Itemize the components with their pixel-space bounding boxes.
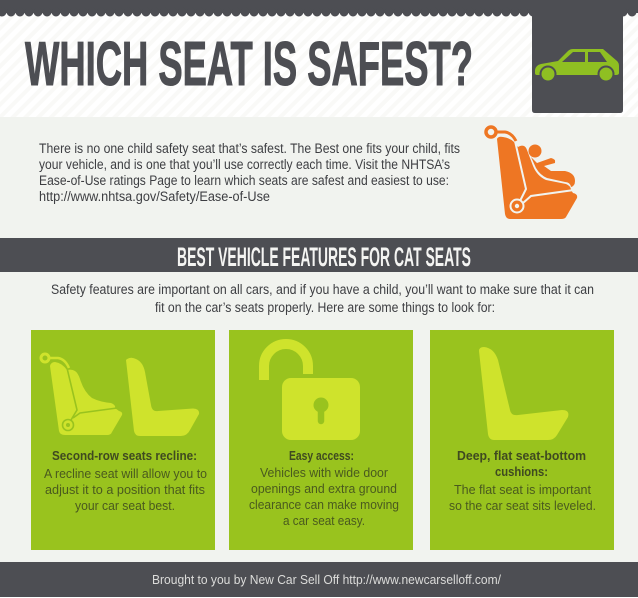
card text xyxy=(449,482,596,513)
card text: A recline seat will allow you to xyxy=(44,466,207,481)
icon: flat seat xyxy=(479,347,568,440)
card text: clearance can make moving xyxy=(249,497,399,512)
footer text: Brought to you by New Car Sell Off http://www.newcarselloff.com/ xyxy=(152,572,501,587)
intro panel xyxy=(0,117,638,238)
header panel xyxy=(0,0,638,117)
card heading xyxy=(457,448,586,479)
intro text: Ease-of-Use ratings Page to learn which seats are safest and easiest to use: xyxy=(39,173,449,188)
card heading: Easy access: xyxy=(289,448,354,463)
icon: orange child car seat xyxy=(486,127,577,219)
card: deep flat seat-bottom cushions xyxy=(430,330,614,550)
card: easy access xyxy=(229,330,413,550)
section heading band xyxy=(0,238,638,272)
features intro text: fit on the car’s seats properly. Here are some things to look for: xyxy=(155,300,495,315)
intro text: http://www.nhtsa.gov/Safety/Ease-of-Use xyxy=(39,189,270,204)
card heading: Deep, flat seat-bottom xyxy=(457,448,586,463)
icon: reclining seat with car seat xyxy=(41,354,199,436)
card text: so the car seat sits leveled. xyxy=(449,498,596,513)
card text: The flat seat is important xyxy=(454,482,591,497)
card: second-row seats recline xyxy=(31,330,215,550)
card heading: Second-row seats recline: xyxy=(52,448,197,463)
features intro text xyxy=(51,282,594,315)
features intro text: Safety features are important on all cars, and if you have a child, you’ll want to make sure that it can xyxy=(51,282,594,297)
card text: your car seat best. xyxy=(75,498,175,513)
footer band xyxy=(0,562,638,597)
icon: open padlock xyxy=(264,344,360,440)
card text: a car seat easy. xyxy=(283,513,365,528)
intro text: There is no one child safety seat that’s safest. The Best one fits your child, fits xyxy=(39,141,460,156)
features panel xyxy=(0,272,638,562)
card text: Vehicles with wide door xyxy=(260,465,389,480)
intro text xyxy=(39,141,460,204)
card text xyxy=(249,465,399,528)
card text: adjust it to a position that fits xyxy=(45,482,205,497)
card heading: cushions: xyxy=(495,464,548,479)
icon: car xyxy=(535,49,619,82)
intro text: your vehicle, and is one that you’ll use correctly each time. Visit the NHTSA’s xyxy=(39,157,450,172)
car tab xyxy=(532,0,623,113)
card text xyxy=(44,466,207,513)
card text: openings and extra ground xyxy=(251,481,397,496)
